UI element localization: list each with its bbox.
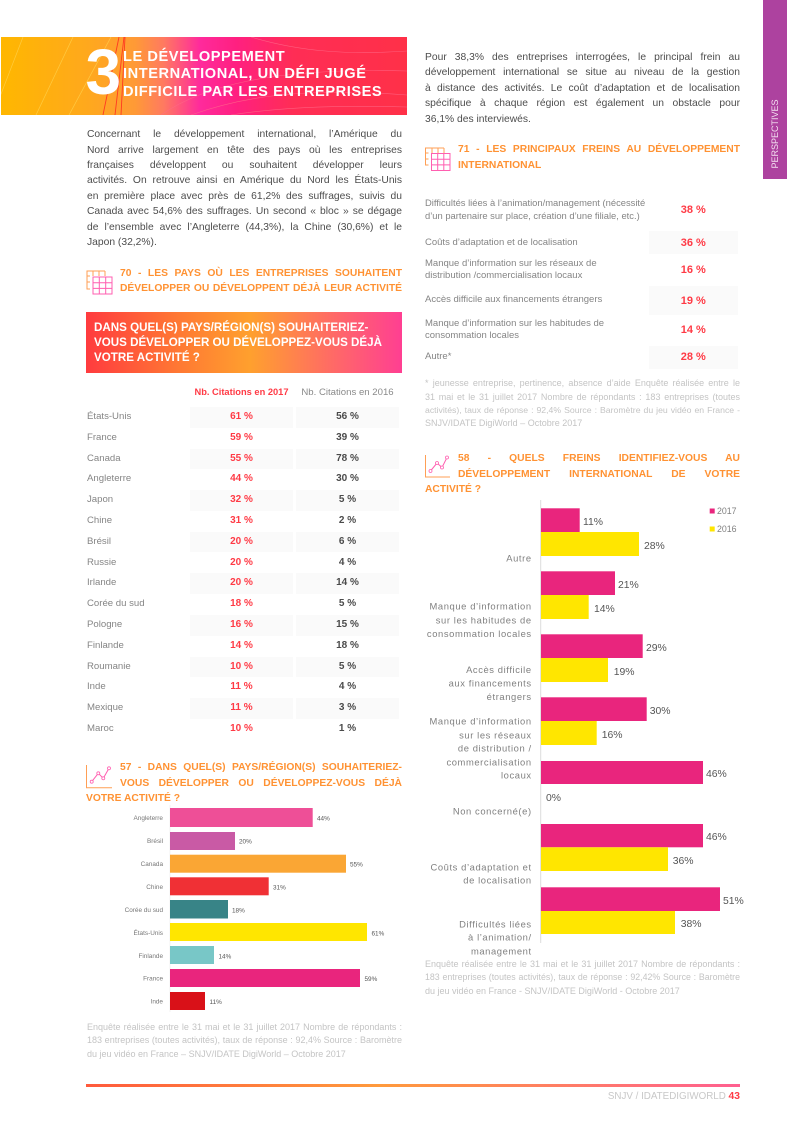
- table: countries: Angleterre: [87, 473, 131, 484]
- bars: financements: 19%: [614, 667, 634, 678]
- bar chart 57: États-Unis: [134, 928, 163, 937]
- table: countries: 20 %: [230, 536, 253, 547]
- table: countries: Irlande: [87, 577, 116, 588]
- table: obstacles: [425, 197, 706, 363]
- category labels: de localisation: [463, 874, 532, 886]
- source note 57: Enquête réalisée entre le 31 mai et le 31 juillet 2017 Nombre de répondants :: [87, 1022, 402, 1032]
- category labels: sur les habitudes de: [436, 614, 532, 626]
- table: countries: Finlande: [87, 640, 124, 651]
- table: obstacles: consommation locales: [425, 330, 519, 341]
- question banner: DANS QUEL(S) PAYS/RÉGION(S) SOUHAITERIEZ-: [94, 321, 368, 334]
- table: obstacles: Manque d’information sur les habitudes de: [425, 318, 604, 329]
- heading 57: 57 - DANS QUEL(S) PAYS/RÉGION(S) SOUHAITERIEZ-: [120, 762, 402, 773]
- right column paragraph: spécifique à chaque région est également un obstacle pour: [425, 98, 740, 109]
- section banner: [1, 37, 407, 115]
- table: countries: [87, 386, 394, 734]
- category labels: Manque d’information: [430, 600, 532, 612]
- table: obstacles: d’un partenaire sur place, création d’une filiale, etc.): [425, 210, 640, 220]
- table: countries: 20 %: [230, 557, 253, 568]
- bar chart 57: 31%: [273, 884, 286, 892]
- bar chart 57: Chine: [146, 884, 163, 891]
- source note 71: * jeunesse entreprise, pertinence, absence d’aide Enquête réalisée entre le: [425, 378, 740, 388]
- table: countries: 4 %: [339, 681, 356, 692]
- source note 57: [87, 1022, 402, 1059]
- bars: Autre: 11%: [583, 517, 603, 528]
- legend: [710, 506, 737, 534]
- bars: Autre: 28%: [644, 541, 665, 552]
- intro paragraph: [87, 129, 402, 248]
- table: countries: 5 %: [339, 598, 356, 609]
- bars: difficultés: 51%: [723, 896, 744, 907]
- table: countries: 2 %: [339, 515, 356, 526]
- table: countries: 6 %: [339, 536, 356, 547]
- bars: coûts: [541, 824, 727, 871]
- bars: non concerné: 46%: [706, 769, 727, 780]
- table: countries: Pologne: [87, 619, 122, 630]
- bar chart 57: Corée du sud: [125, 907, 163, 914]
- heading 70: 70 - LES PAYS OÙ LES ENTREPRISES SOUHAITENT: [120, 268, 402, 279]
- bars: non concerné: 0%: [546, 793, 561, 804]
- bar chart 57: 18%: [232, 908, 245, 914]
- table: countries: 4 %: [339, 557, 356, 568]
- table: countries: 3 %: [339, 702, 356, 713]
- category labels: Manque d’information: [430, 716, 532, 726]
- right column paragraph: à distance des activités. Le coût d’adaptation et de localisation: [425, 83, 740, 94]
- section title: INTERNATIONAL, UN DÉFI JUGÉ: [123, 66, 366, 82]
- section title: DIFFICILE PAR LES ENTREPRISES: [123, 84, 382, 100]
- bars: non concerné: [541, 761, 727, 804]
- question banner: VOUS DÉVELOPPER OU DÉVELOPPEZ-VOUS DÉJÀ: [94, 336, 382, 349]
- source note 57: du jeu vidéo en France – SNJV/IDATE DigiWorld – Octobre 2017: [87, 1049, 346, 1059]
- source note 58: Enquête réalisée entre le 31 mai et le 31 juillet 2017 Nombre de répondants :: [425, 959, 740, 969]
- table: countries: Brésil: [87, 536, 111, 547]
- heading 58: DÉVELOPPEMENT INTERNATIONAL DE VOTRE: [458, 468, 740, 480]
- table: obstacles: Difficultés liées à l’animation/management (nécessité: [425, 197, 645, 208]
- table: countries: États-Unis: [87, 411, 131, 422]
- table: obstacles: Manque d’information sur les réseaux de: [425, 258, 597, 268]
- table: countries: 14 %: [230, 640, 253, 651]
- intro paragraph: en première place avec près de 61,2% des suffrages, suivis du: [87, 191, 402, 202]
- bar chart 57: Inde: [151, 998, 163, 1006]
- table: countries: 11 %: [230, 681, 253, 692]
- category labels: sur les réseaux: [459, 730, 532, 740]
- heading 57: [86, 761, 402, 804]
- source note 57: 183 entreprises (toutes activités), taux de réponse : 92,4% Source : Baromètre: [87, 1035, 402, 1045]
- bar chart 57: Canada: [141, 861, 163, 868]
- bar chart 57: 61%: [372, 930, 385, 938]
- section number 3: 3: [86, 36, 121, 108]
- heading 58: [425, 453, 740, 495]
- table: countries: Canada: [87, 453, 121, 464]
- table: countries: Roumanie: [87, 661, 131, 672]
- table: countries: Chine: [87, 515, 112, 526]
- bars: réseaux: 30%: [650, 706, 670, 717]
- bars: habitudes: 14%: [594, 604, 615, 615]
- right column paragraph: 36,1% des interviewés.: [425, 114, 531, 124]
- table: countries: 55 %: [230, 453, 253, 464]
- bars: financements: 29%: [646, 643, 667, 654]
- bars: difficultés: [541, 887, 744, 934]
- category labels: consommation locales: [427, 628, 532, 639]
- right column paragraph: [425, 52, 740, 124]
- bar chart 57: 11%: [210, 999, 222, 1006]
- source note 71: [425, 378, 740, 428]
- bar chart 57: Finlande: [138, 953, 163, 960]
- source note 58: du jeu vidéo en France - SNJV/IDATE DigiWorld - Octobre 2017: [425, 986, 680, 996]
- table: countries: 20 %: [230, 577, 253, 588]
- category labels: Autre: [506, 552, 532, 564]
- table: countries: 1 %: [339, 723, 356, 734]
- table: countries: Mexique: [87, 702, 123, 713]
- source note 71: activités), taux de réponse : 92,4% Source : Baromètre du jeu vidéo en France -: [425, 405, 740, 415]
- bars: coûts: 46%: [706, 832, 727, 843]
- bar chart 57: 55%: [350, 862, 363, 868]
- table: obstacles: distribution /commercialisation locaux: [425, 270, 582, 280]
- legend: 2016: [717, 524, 737, 534]
- table: obstacles: 38 %: [681, 204, 706, 216]
- table: countries: 56 %: [336, 411, 359, 422]
- side tab: perspectives: [763, 0, 787, 179]
- bar chart 57: 14%: [218, 954, 232, 960]
- table: obstacles: 28 %: [681, 351, 706, 363]
- category labels: étrangers: [487, 691, 532, 702]
- side tab label: PERSPECTIVES: [770, 99, 780, 169]
- question banner: VOTRE ACTIVITÉ ?: [94, 351, 200, 364]
- category labels: Accès difficile: [466, 664, 532, 675]
- table: obstacles: 16 %: [681, 264, 706, 276]
- bar chart 57: Brésil: [147, 838, 163, 845]
- table: countries: 18 %: [230, 598, 253, 609]
- bars: difficultés: 38%: [681, 919, 701, 930]
- table: countries: 5 %: [339, 661, 356, 672]
- heading 57: VOUS DÉVELOPPER OU DÉVELOPPEZ-VOUS DÉJÀ: [120, 778, 402, 788]
- table: countries: 15 %: [336, 619, 359, 630]
- table: countries: Inde: [87, 681, 106, 692]
- heading 71: 71 - LES PRINCIPAUX FREINS AU DÉVELOPPEMENT: [458, 144, 740, 155]
- heading 71: INTERNATIONAL: [458, 160, 541, 170]
- legend: 2017: [717, 506, 737, 516]
- source note 71: 31 mai et le 31 juillet 2017 Nombre de répondants : 183 entreprises (toutes: [425, 392, 740, 402]
- table: obstacles: 36 %: [681, 237, 706, 249]
- table: obstacles: Accès difficile aux financements étrangers: [425, 294, 602, 305]
- intro paragraph: activités. On retrouve ainsi en Amérique du Nord les États-Unis: [87, 175, 402, 186]
- table: countries: 78 %: [336, 453, 359, 464]
- source note 58: [425, 959, 740, 996]
- table: countries: 30 %: [336, 473, 359, 484]
- table: countries: France: [87, 432, 117, 443]
- table: countries: Corée du sud: [87, 598, 145, 609]
- table: countries: 31 %: [230, 515, 253, 526]
- category labels: [427, 552, 532, 956]
- table header 2017: Nb. Citations en 2017: [194, 387, 289, 397]
- table: countries: 61 %: [230, 411, 253, 422]
- bar chart 57: Angleterre: [134, 815, 163, 822]
- source note 58: 183 entreprises (toutes activités), taux de réponse : 92,42% Source : Baromètre: [425, 972, 740, 982]
- table: countries: 44 %: [230, 473, 253, 484]
- intro paragraph: françaises développent ou souhaitent développer leurs: [87, 160, 402, 171]
- intro paragraph: Canada avec 54,6% des suffrages. Un second « bloc » se dégage: [87, 206, 402, 217]
- category labels: de distribution /: [458, 742, 532, 754]
- table: countries: 11 %: [230, 702, 253, 713]
- heading 70: DÉVELOPPER OU DÉVELOPPENT DÉJÀ LEUR ACTIVITÉ: [120, 283, 402, 294]
- table: countries: Japon: [87, 494, 113, 505]
- table: countries: 32 %: [230, 494, 253, 505]
- table: countries: 5 %: [339, 494, 356, 505]
- intro paragraph: de l’ensemble avec l’Angleterre (44,3%), la Chine (30,6%) et le: [87, 222, 402, 232]
- table: countries: 10 %: [230, 723, 253, 734]
- table: countries: 39 %: [336, 432, 359, 443]
- table: countries: 59 %: [230, 432, 253, 443]
- table: obstacles: 14 %: [681, 324, 706, 336]
- table: countries: 14 %: [336, 577, 359, 588]
- bars: réseaux: 16%: [602, 730, 622, 741]
- intro paragraph: Japon (32,2%).: [87, 237, 157, 248]
- table: obstacles: 19 %: [681, 294, 706, 306]
- category labels: aux financements: [449, 678, 532, 688]
- category labels: Coûts d’adaptation et: [430, 862, 532, 872]
- section title: [123, 48, 382, 100]
- category labels: commercialisation: [446, 756, 532, 768]
- bar chart 57: France: [143, 976, 163, 982]
- table: countries: 18 %: [336, 640, 359, 651]
- category labels: management: [471, 946, 532, 956]
- bars: réseaux: [541, 697, 670, 745]
- heading 70: [120, 266, 402, 294]
- bars: financements: [541, 634, 667, 682]
- table: countries: Maroc: [87, 723, 114, 734]
- table header 2016: Nb. Citations en 2016: [301, 386, 394, 398]
- table: countries: 16 %: [230, 619, 253, 630]
- table: obstacles: Coûts d’adaptation et de localisation: [425, 236, 578, 248]
- heading 57: VOTRE ACTIVITÉ ?: [86, 793, 180, 804]
- bars: Autre: [541, 508, 665, 556]
- right column paragraph: développement international se situe au niveau de la gestion: [425, 67, 740, 78]
- intro paragraph: Concernant le développement international, l’Amérique du: [87, 129, 402, 140]
- table: countries: Russie: [87, 557, 116, 568]
- category labels: à l’animation/: [468, 932, 532, 942]
- footer credit and page number: SNJV / IDATEDIGIWORLD 43: [608, 1091, 740, 1102]
- category labels: Difficultés liées: [459, 918, 532, 930]
- heading 58: 58 - QUELS FREINS IDENTIFIEZ-VOUS AU: [458, 453, 740, 464]
- footer rule: [86, 1084, 740, 1086]
- bars: habitudes: 21%: [618, 580, 639, 591]
- section title: LE DÉVELOPPEMENT: [123, 49, 285, 65]
- question banner: [86, 312, 402, 373]
- intro paragraph: Nord arrive largement en tête des pays où les entreprises: [87, 144, 402, 156]
- bar chart 57: 20%: [239, 838, 252, 846]
- category labels: Non concerné(e): [453, 806, 532, 816]
- table: obstacles: Autre*: [425, 350, 451, 362]
- right column paragraph: Pour 38,3% des entreprises interrogées, le principal frein au: [425, 52, 740, 63]
- category labels: locaux: [501, 770, 532, 780]
- heading 58: ACTIVITÉ ?: [425, 484, 481, 495]
- source note 71: SNJV/IDATE DigiWorld – Octobre 2017: [425, 418, 582, 428]
- bars: habitudes: [541, 571, 639, 619]
- table: countries: 10 %: [230, 661, 253, 672]
- bar chart 57: 59%: [364, 976, 378, 983]
- bars: coûts: 36%: [673, 856, 693, 867]
- bar chart 57: 44%: [317, 816, 330, 822]
- heading 71: [458, 143, 740, 170]
